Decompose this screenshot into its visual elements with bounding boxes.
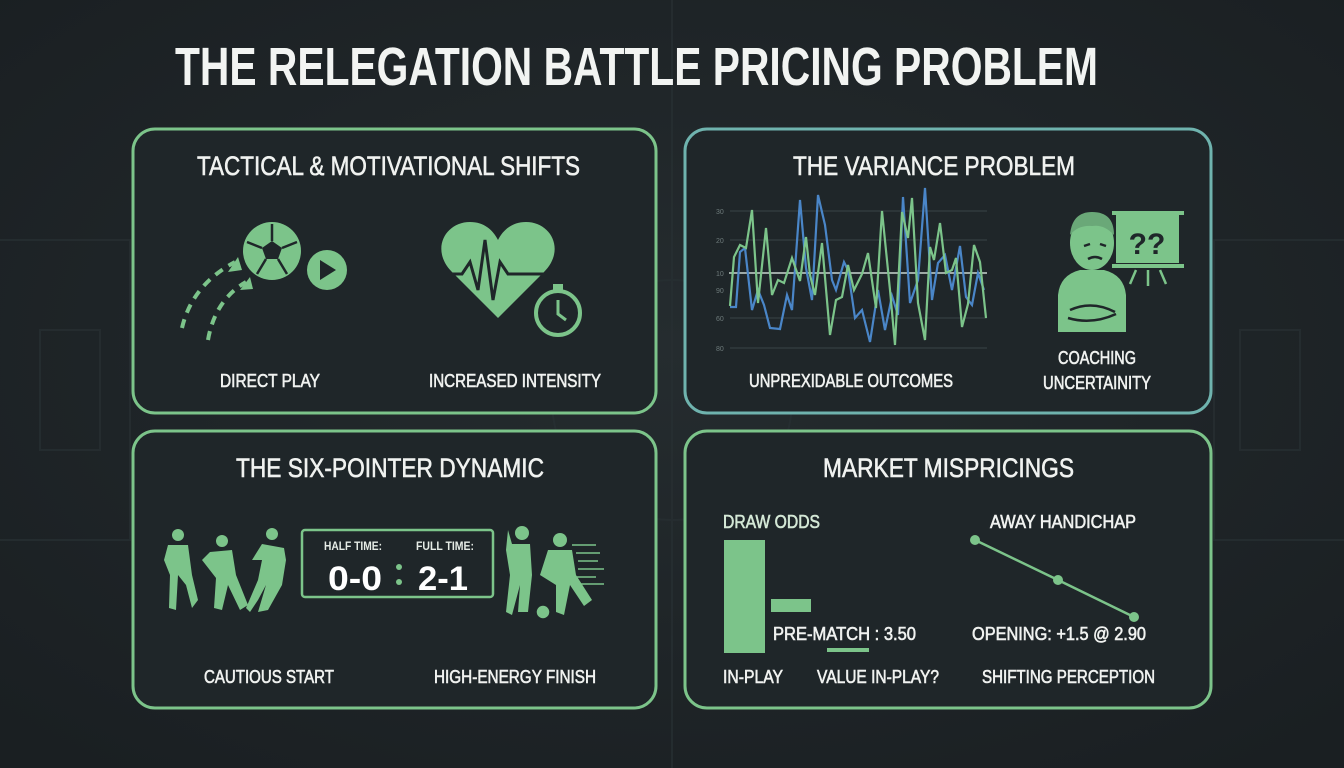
icon: heart with stopwatch <box>441 222 580 335</box>
label: direct play: DIRECT PLAY <box>220 371 320 391</box>
label: value in-play: VALUE IN-PLAY? <box>817 667 939 687</box>
icon: coach with board: ?? <box>1129 228 1165 261</box>
label: coaching uncertainty: COACHING <box>1058 348 1136 368</box>
label: increased intensity: INCREASED INTENSITY <box>429 371 601 391</box>
chart: volatile lines: 10 <box>716 271 724 278</box>
heading: six-pointer: THE SIX-POINTER DYNAMIC <box>236 453 544 483</box>
chart: away handicap line: AWAY HANDICHAP <box>990 512 1136 532</box>
chart: volatile lines: 90 <box>716 288 724 295</box>
scoreboard: 2-1 <box>418 560 468 598</box>
label: in-play: IN-PLAY <box>723 667 783 687</box>
chart: volatile lines <box>716 188 987 353</box>
panel: variance problem <box>685 129 1211 413</box>
icon: coach with board <box>1058 211 1184 332</box>
panel: variance problem: UNCERTAINITY <box>1043 373 1151 393</box>
panel: market mispricings <box>685 431 1211 708</box>
label: unpredictable outcomes: UNPREXIDABLE OUTCOMES <box>749 371 953 391</box>
chart: volatile lines: 80 <box>716 346 724 353</box>
scoreboard <box>302 530 493 598</box>
chart: draw odds bars <box>723 512 916 653</box>
panel: six-pointer dynamic <box>133 431 656 708</box>
icon: energetic players <box>506 526 604 619</box>
scoreboard: HALF TIME: <box>324 539 382 553</box>
icon: ball with arrows <box>182 222 347 340</box>
chart: volatile lines: 60 <box>716 316 724 323</box>
chart: volatile lines: 30 <box>716 209 724 216</box>
label: cautious start: CAUTIOUS START <box>204 667 334 687</box>
label: shifting perception: SHIFTING PERCEPTION <box>982 667 1155 687</box>
heading: variance: THE VARIANCE PROBLEM <box>793 151 1075 181</box>
chart: away handicap line <box>970 512 1146 644</box>
heading: market: MARKET MISPRICINGS <box>823 453 1074 483</box>
panel: tactical & motivational shifts <box>133 129 656 413</box>
chart: volatile lines: 20 <box>716 238 724 245</box>
chart: draw odds bars: PRE-MATCH : 3.50 <box>773 624 916 644</box>
label: high-energy finish: HIGH-ENERGY FINISH <box>434 667 596 687</box>
heading: tactical: TACTICAL & MOTIVATIONAL SHIFTS <box>197 151 580 181</box>
scoreboard: FULL TIME: <box>416 539 474 553</box>
chart: away handicap line: OPENING: +1.5 @ 2.90 <box>972 624 1146 644</box>
chart: draw odds bars: DRAW ODDS <box>723 512 820 532</box>
scoreboard: 0-0 <box>328 560 382 598</box>
icon: cautious players <box>164 528 286 612</box>
